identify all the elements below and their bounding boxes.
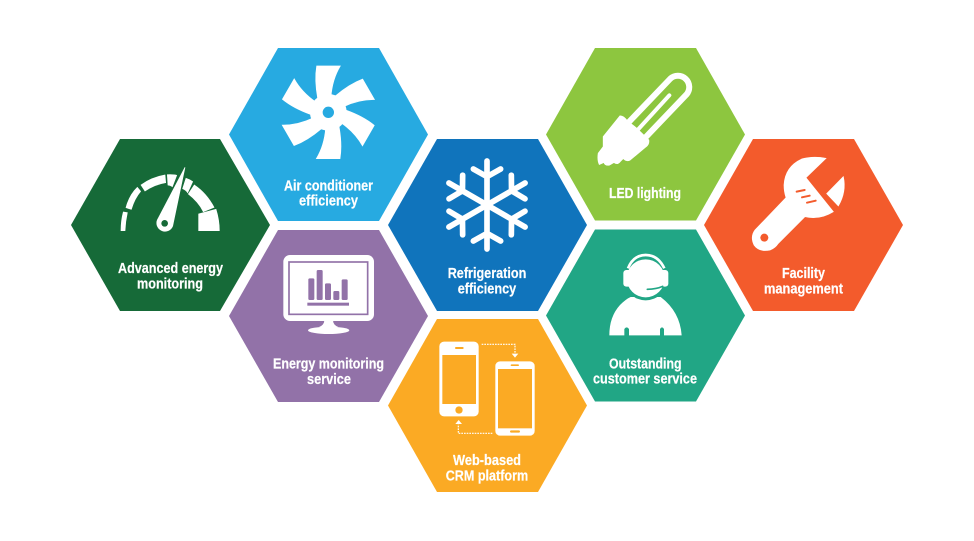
- label: facility management: management: [764, 282, 843, 298]
- label: air conditioner efficiency: Air conditioner: [284, 178, 373, 194]
- label: energy monitoring service: [273, 356, 384, 388]
- label: advanced energy monitoring: monitoring: [137, 276, 203, 292]
- label: refrigeration efficiency: Refrigeration: [448, 266, 526, 282]
- panel: outstanding customer service: [546, 230, 745, 402]
- icon: fan: [282, 66, 375, 159]
- label: outstanding customer service: Outstanding: [609, 356, 682, 372]
- icon: agent with headset: [609, 255, 682, 335]
- panel: air conditioner efficiency: [229, 48, 428, 221]
- label: facility management: Facility: [782, 266, 825, 282]
- panel: advanced energy monitoring: [71, 139, 270, 311]
- label: web-based CRM platform: CRM platform: [446, 468, 528, 484]
- panel: web-based CRM platform: [388, 319, 587, 492]
- icon: monitor with bar chart: [283, 255, 374, 334]
- panel: refrigeration efficiency: [388, 139, 587, 311]
- icon: light bulb: [598, 76, 689, 165]
- label: refrigeration efficiency: [448, 266, 526, 298]
- label: energy monitoring service: Energy monitoring: [273, 356, 384, 372]
- label: air conditioner efficiency: [284, 178, 373, 210]
- icon: snowflake: [442, 161, 532, 249]
- icon: gauge: [121, 167, 219, 231]
- label: advanced energy monitoring: Advanced energy: [118, 261, 223, 277]
- label: refrigeration efficiency: efficiency: [458, 282, 516, 298]
- panel: facility management: [704, 139, 903, 311]
- icon: two phones with sync arrows: [439, 342, 535, 436]
- label: energy monitoring service: service: [307, 372, 351, 388]
- label: LED lighting: LED lighting: [609, 186, 681, 202]
- panel: LED lighting: [546, 48, 745, 220]
- label: outstanding customer service: customer service: [593, 372, 697, 388]
- label: outstanding customer service: [593, 356, 697, 388]
- label: web-based CRM platform: Web-based: [453, 453, 521, 469]
- panel: energy monitoring service: [229, 230, 428, 402]
- label: facility management: [764, 266, 843, 298]
- label: advanced energy monitoring: [118, 261, 223, 292]
- icon: wrench: [752, 157, 844, 251]
- label: air conditioner efficiency: efficiency: [299, 194, 358, 210]
- bars: [307, 270, 349, 306]
- label: web-based CRM platform: [446, 453, 528, 484]
